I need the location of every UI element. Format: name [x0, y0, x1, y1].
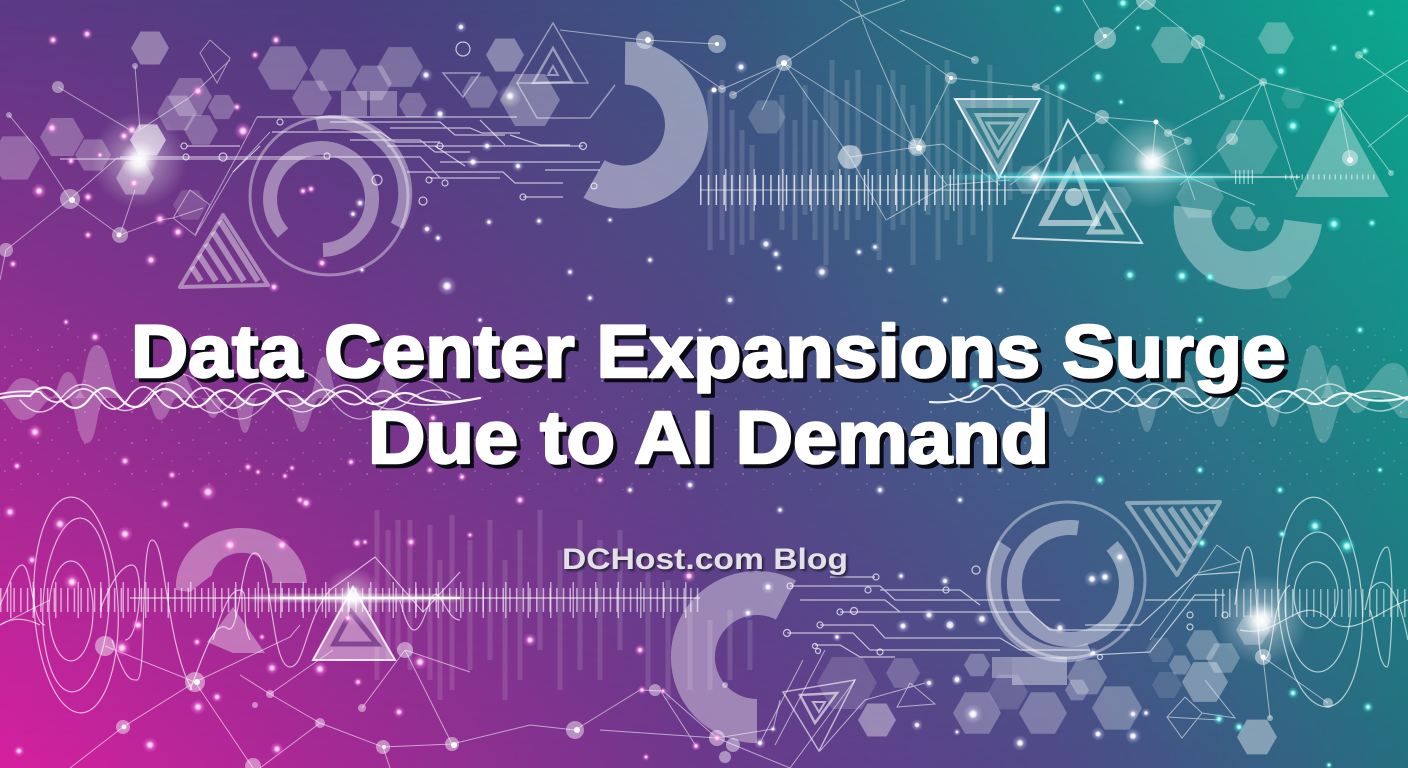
circuit end loops: top left — [181, 42, 597, 205]
triangle: solid far right — [1295, 108, 1389, 197]
title — [131, 310, 1286, 479]
big arc: top centre — [594, 63, 686, 187]
subtitle: blog name: DCHost.com Blog — [562, 543, 848, 576]
network lines: top left — [0, 40, 270, 280]
title: Data Center Expansions Surge — [131, 310, 1286, 393]
network lines: top centre and right — [560, 0, 1408, 220]
ring: bottom right — [989, 502, 1145, 658]
circuit end loops: bottom right — [784, 566, 1228, 660]
particles: centre, white-blue — [348, 21, 1151, 751]
big arc: bottom centre — [693, 593, 786, 721]
central waveform right: bright strands — [930, 383, 1408, 413]
light beam: top right — [930, 170, 1375, 184]
arc: top right — [1193, 208, 1303, 270]
central waveform left: bright strands — [0, 372, 480, 419]
triangle: striped bottom right — [1127, 502, 1220, 575]
ring: top left — [250, 117, 408, 275]
title: Due to AI Demand — [368, 396, 1049, 479]
light flares — [60, 84, 1308, 666]
network lines: bottom left — [0, 600, 790, 768]
triangle: large outline with nested shapes — [1013, 120, 1142, 243]
network nodes: bottom — [95, 636, 1333, 768]
network lines: bottom right — [760, 545, 1328, 768]
hexagon cluster: top left — [0, 32, 560, 220]
particles: left, pink — [3, 28, 723, 761]
hexagon cluster: bottom right — [817, 615, 1277, 754]
triangle: bottom left filled — [313, 587, 395, 660]
signal bars: bottom right — [1215, 589, 1408, 617]
central waveform left: mesh lobes — [0, 345, 405, 443]
network nodes: top — [0, 0, 1394, 257]
circuit traces: bottom right — [787, 572, 1240, 657]
central waveform: right — [930, 345, 1408, 443]
triangle: nested inverted top right — [955, 99, 1040, 178]
wave loops: bottom left — [0, 495, 460, 715]
wave loops: bottom right — [1235, 494, 1408, 710]
central waveform: left — [0, 345, 480, 443]
signal bars: top centre — [700, 175, 1100, 205]
triangle: bottom centre inverted — [783, 680, 855, 751]
triangle: top centre outline — [443, 23, 615, 118]
signal columns: bottom left — [377, 510, 750, 700]
hexagon cluster: top right — [748, 22, 1305, 298]
central waveform right: mesh lobes — [1050, 345, 1408, 443]
arc: bottom left — [176, 528, 307, 653]
circuit traces: top left — [120, 117, 600, 197]
signal columns: top centre — [710, 60, 1060, 265]
particles: right, cyan — [968, 0, 1384, 768]
signal bars: bottom left — [0, 596, 700, 600]
triangle: striped top left — [180, 215, 268, 287]
